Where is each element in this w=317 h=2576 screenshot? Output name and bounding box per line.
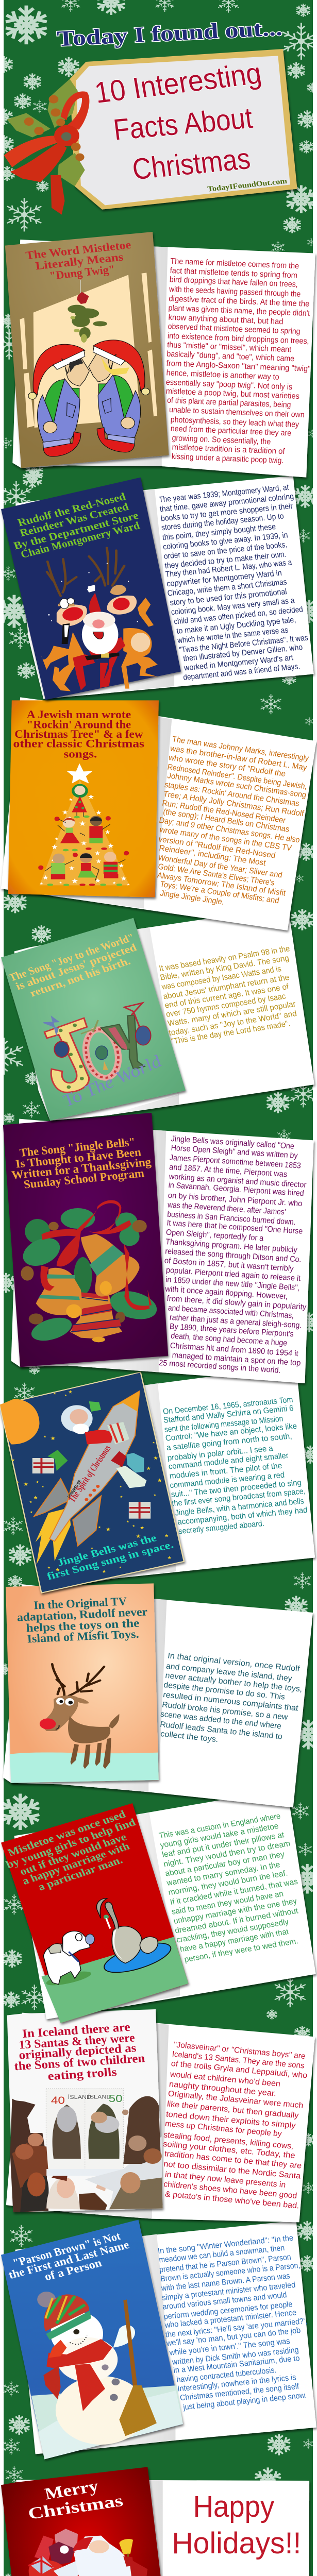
body text: This was a custom in England where [158, 1811, 281, 1840]
heading: merry christmas [26, 2477, 125, 2523]
illustration: icelandic stamps and trolls: 40 [51, 2094, 65, 2106]
body text [158, 483, 309, 682]
heading: first Song sung in space. [45, 1539, 175, 1582]
body text: was composed by Isaac Watts and is [160, 964, 282, 991]
body text: have a happy marriage with that [179, 1927, 290, 1954]
body text: with it once again flopping. However, [164, 1284, 288, 1301]
heading: Literally Means [35, 251, 124, 273]
body text [157, 2233, 308, 2412]
card cover [1, 478, 181, 700]
body text [158, 1811, 299, 1964]
heading [11, 1136, 152, 1191]
body text: Gold; We Are Santa's Elves; There's [157, 862, 275, 887]
body text [156, 735, 310, 907]
gift tag [4, 49, 297, 215]
body text: story to be used for this promotional [169, 587, 288, 607]
body text: morning, they would burn the leaf. [168, 1869, 289, 1897]
heading: eating trolls [47, 2065, 118, 2083]
body text: Bible, written by King David. The song [159, 954, 290, 982]
body text: said to mean they would have an [171, 1889, 284, 1917]
open card page [6, 2013, 315, 2222]
heading: other classic Christmas [13, 738, 144, 750]
body text: not too dissimilar to the Nordic Santa [163, 2159, 302, 2180]
heading: Reindeer Was Created [18, 500, 130, 539]
heading: A Jewish man wrote [27, 709, 131, 721]
illustration: santa riding a rocket: The Spirit of Christmas [66, 1444, 113, 1503]
illustration: reindeer and santa [41, 548, 158, 691]
body text: scene was added to the end where [160, 1709, 282, 1731]
panel: happy holidays [1, 2467, 309, 2576]
heading [16, 1595, 148, 1646]
heading: "Rockin' Around the [27, 719, 131, 731]
heading: is about Jesus' projected [14, 941, 139, 992]
heading: merry christmas: Merry [43, 2477, 101, 2503]
heading: By the Department Store [12, 510, 140, 552]
heading: "Dung Twig" [49, 263, 116, 282]
heading: The Word Mistletoe [25, 239, 132, 262]
body text: 25 most recorded songs in the world. [159, 1358, 281, 1375]
page fold shading [85, 2234, 183, 2450]
illustration: icelandic stamps and trolls: 50 [109, 2093, 123, 2105]
body text: hence, mistletoe is another way to [166, 368, 279, 381]
body text: copywriter for Montgomery Ward in [166, 568, 282, 588]
elf hair details [70, 359, 84, 372]
body text: crackling, they would supposedly [175, 1917, 290, 1944]
heading: In the Original TV [34, 1595, 127, 1612]
page fold shading [68, 1130, 168, 1372]
red ribbon bow with holly and bells [4, 79, 89, 215]
illustration: christmas bells with ribbon [17, 1200, 161, 1345]
card cover [7, 2009, 163, 2212]
heading: songs. [64, 748, 97, 760]
message: happy holidays [172, 2490, 301, 2560]
body text: Toys; We're a Couple of Misfits; and [159, 879, 280, 905]
card cover [1, 2219, 183, 2459]
page fold shading [109, 1383, 184, 1579]
body text [159, 1651, 303, 1744]
heading: merry christmas: Christmas [26, 2491, 125, 2523]
heading [4, 1808, 138, 1893]
body text: while you're in town'." The song was [169, 2336, 291, 2357]
tag paper [76, 56, 290, 205]
open card page [16, 476, 314, 699]
card cover [1, 1803, 189, 2023]
page fold shading [87, 489, 174, 695]
page fold shading [107, 1812, 189, 2009]
body text: having contracted tuberculosis. [176, 2365, 277, 2384]
heading: The Song "Jingle Bells" [19, 1136, 136, 1159]
heading: Rudolf the Red-Nosed [16, 490, 127, 529]
card cover: merry christmas [1, 2467, 172, 2576]
body text: a satellite going from north to south, [166, 1432, 292, 1452]
body text: resulted in numerous complaints that [162, 1690, 299, 1713]
body text: end of this current age. It was one of [164, 982, 290, 1010]
heading: originally depicted as [18, 2041, 137, 2062]
body text: about a particular boy or man they [164, 1850, 286, 1878]
page fold shading [69, 246, 169, 466]
heading: Sunday School Program [23, 1167, 145, 1191]
illustration: dog and cat under mistletoe [43, 1899, 175, 1988]
body text: like their parents, but then gradually [166, 2099, 299, 2120]
card cover [5, 232, 169, 468]
body text: growing on. So essentially, the [172, 433, 271, 446]
illustration: icelandic stamps and trolls: ÍSLAND [88, 2094, 111, 2100]
heading: In Iceland there are [22, 2020, 131, 2040]
panel: rudolf tv adaptation [3, 1583, 313, 1807]
page fold shading [53, 717, 172, 908]
heading: Is Thought to Have Been [15, 1146, 142, 1171]
heading: return, not his birth. [28, 955, 132, 999]
heading: "Parson Brown" is Not [11, 2230, 122, 2269]
message: happy holidays: Happy [193, 2490, 274, 2523]
body text: Rudolf leads Santa to the island to [159, 1720, 283, 1741]
body text: despite the promise to do so. This [163, 1680, 286, 1701]
heading: a happy marriage with [20, 1840, 131, 1887]
body text: toned down their exploits to simply [165, 2110, 296, 2130]
illustration: snowman [31, 2292, 183, 2459]
body text: young girls would take a mistletoe [159, 1821, 279, 1850]
open card page [16, 2480, 309, 2576]
heading [12, 490, 141, 561]
card cover [8, 700, 159, 897]
body text: mess up Christmas for people by [164, 2119, 282, 2139]
body text [158, 944, 297, 1046]
open card page [0, 1365, 315, 1591]
body text [159, 1134, 307, 1375]
heading [13, 2020, 145, 2083]
body text: Reindeer", including: The Most [158, 843, 266, 868]
body text [162, 2040, 308, 2210]
open card page [15, 2221, 316, 2454]
panel: rudolf and montgomery ward [1, 476, 314, 700]
open card page [14, 1789, 316, 2019]
heading: by young girls to help find [4, 1816, 138, 1871]
open card page [3, 1584, 313, 1807]
heading [13, 709, 144, 760]
heading: Jingle Bells was the [56, 1532, 158, 1568]
body text: version of "Rudolf the Red-Nosed [158, 835, 276, 860]
card cover [6, 1583, 159, 1783]
illustration: right elf [89, 340, 149, 452]
open card page [12, 240, 315, 478]
body text: modules in front. The pilot of the [169, 1461, 282, 1481]
body text: and company leave the island, they [165, 1662, 293, 1683]
illustration: star and children christmas tree [38, 764, 130, 886]
tag card [70, 49, 297, 210]
open card page [1, 697, 316, 930]
body text: Run; Rudolf the Red-Nosed Reindeer [161, 799, 287, 825]
body text: who wrote the story of "Rudolf the [168, 753, 287, 778]
heading: The Song "Joy to the World" [7, 931, 136, 984]
illustration: left elf [28, 344, 89, 456]
illustration: santa riding a rocket: POWERED BY: [66, 1479, 83, 1499]
body text: Open Sleigh", reportedly for a [165, 1228, 264, 1243]
right elf blonde hair [101, 357, 129, 375]
tag heading: Christmas [130, 142, 252, 186]
tag heading: Facts About [111, 101, 255, 146]
illustration: icelandic stamps and trolls [10, 2089, 163, 2212]
body text: about Jesus' triumphant return at the [162, 973, 290, 1001]
body text: command module is wearing a red [169, 1470, 285, 1490]
body text: kissing under a parasitic poop twig. [171, 452, 284, 465]
card cover [1, 918, 186, 1121]
heading: Christmas Tree" & a few [14, 728, 143, 740]
heading: 13 Santas & they were [18, 2030, 136, 2052]
heading [25, 239, 132, 282]
body text: naughty throughout the year. [169, 2079, 277, 2098]
illustration: santa riding a rocket [0, 1390, 172, 1573]
panel: jingle bells thanksgiving [3, 1113, 314, 1383]
heading: helps the toys on the [26, 1617, 140, 1635]
body text: over 750 hymns composed by Isaac [165, 992, 287, 1019]
heading: adaptation, Rudolf never [16, 1605, 148, 1624]
body text: tradition has come to be that they are [164, 2149, 302, 2170]
heading: Island of Misfit Toys. [27, 1628, 139, 1646]
illustration: santa with sack and bell [27, 2529, 147, 2576]
heading: Written for a Thanksgiving [11, 1156, 152, 1182]
card cover [3, 1113, 168, 1367]
page fold shading [61, 1599, 167, 1792]
illustration: icelandic stamps and trolls: ÍSLAND [68, 2094, 91, 2100]
panel: rockin around the christmas tree [1, 697, 316, 930]
panel: parson brown [1, 2219, 316, 2459]
body text: this point, they simply bought these [162, 522, 276, 542]
body text: Rudolf broke his promise, so a new [161, 1700, 289, 1722]
illustration: red-nosed reindeer [40, 1664, 119, 1769]
open card page [14, 907, 314, 1121]
heading: a particular man. [36, 1854, 124, 1893]
panel: iceland 13 santas [6, 2009, 315, 2222]
heading: Chain Montgomery Ward [19, 519, 141, 561]
panel: mistletoe marriage [1, 1789, 316, 2023]
illustration: joy lettering with ornaments: To The World [59, 1052, 165, 1110]
heading: the Sons of two children [13, 2051, 145, 2073]
heading: Mistletoe was once used [6, 1808, 128, 1859]
body text: wanted to marry someday. In the [165, 1860, 281, 1888]
body text: leaf and put it under their pillows at [161, 1830, 285, 1859]
tag heading: 10 Interesting [92, 57, 264, 110]
panel: jingle bells in space [0, 1365, 315, 1593]
illustration: window background [20, 273, 157, 428]
body text: dreamed about. If it burned without [174, 1906, 299, 1935]
open card page [11, 1119, 314, 1383]
body text: command module and eight smaller [168, 1451, 289, 1471]
illustration: joy lettering with ornaments [43, 1003, 165, 1110]
body text: probably in polar orbit... I see a [167, 1444, 274, 1463]
body text: stealing food, presents, killing cows, [163, 2130, 294, 2150]
tag url: TodayIFoundOut.com [207, 177, 288, 193]
card cover [0, 1372, 184, 1593]
body text: in that they now leave presents in [164, 2170, 286, 2190]
heading: the First and Last Name [7, 2239, 131, 2282]
body text: soiling your clothes, etc. Today, the [162, 2139, 296, 2160]
heading: out if they would have [18, 1831, 128, 1877]
panel: joy to the world [1, 907, 314, 1121]
body text: know anything about that, but had [168, 313, 283, 326]
panel: mistletoe dung twig [5, 232, 315, 478]
body text: Always Tomorrow; The Island of Misfit [156, 871, 287, 897]
page fold shading [107, 927, 179, 1115]
illustration: mistletoe sprig [68, 280, 107, 343]
page fold shading [69, 2480, 172, 2576]
body text: In that original version, once Rudolf [167, 1651, 301, 1673]
heading: of a Person [43, 2257, 104, 2283]
body text: secretly smuggled aboard. [178, 1519, 265, 1536]
body text: Wonderful Day of the Year; Silver and [157, 853, 283, 879]
body text: collect the toys. [160, 1729, 219, 1744]
body text: and 1857. At the time, Pierpont was [169, 1162, 288, 1179]
body text [162, 1395, 308, 1536]
body text: night. They would then try to dream [162, 1839, 291, 1869]
page fold shading [69, 2023, 169, 2219]
tag heading [92, 57, 264, 186]
body text: Jingle Jingle Jingle. [159, 889, 225, 907]
body text: & potato's in those who've been bad. [164, 2190, 300, 2210]
body text: would eat children who'd been [169, 2070, 281, 2088]
body text [165, 257, 311, 465]
title: Today I found out... [56, 15, 283, 51]
body text: mistletoe tradition is a tradition of [172, 443, 285, 456]
